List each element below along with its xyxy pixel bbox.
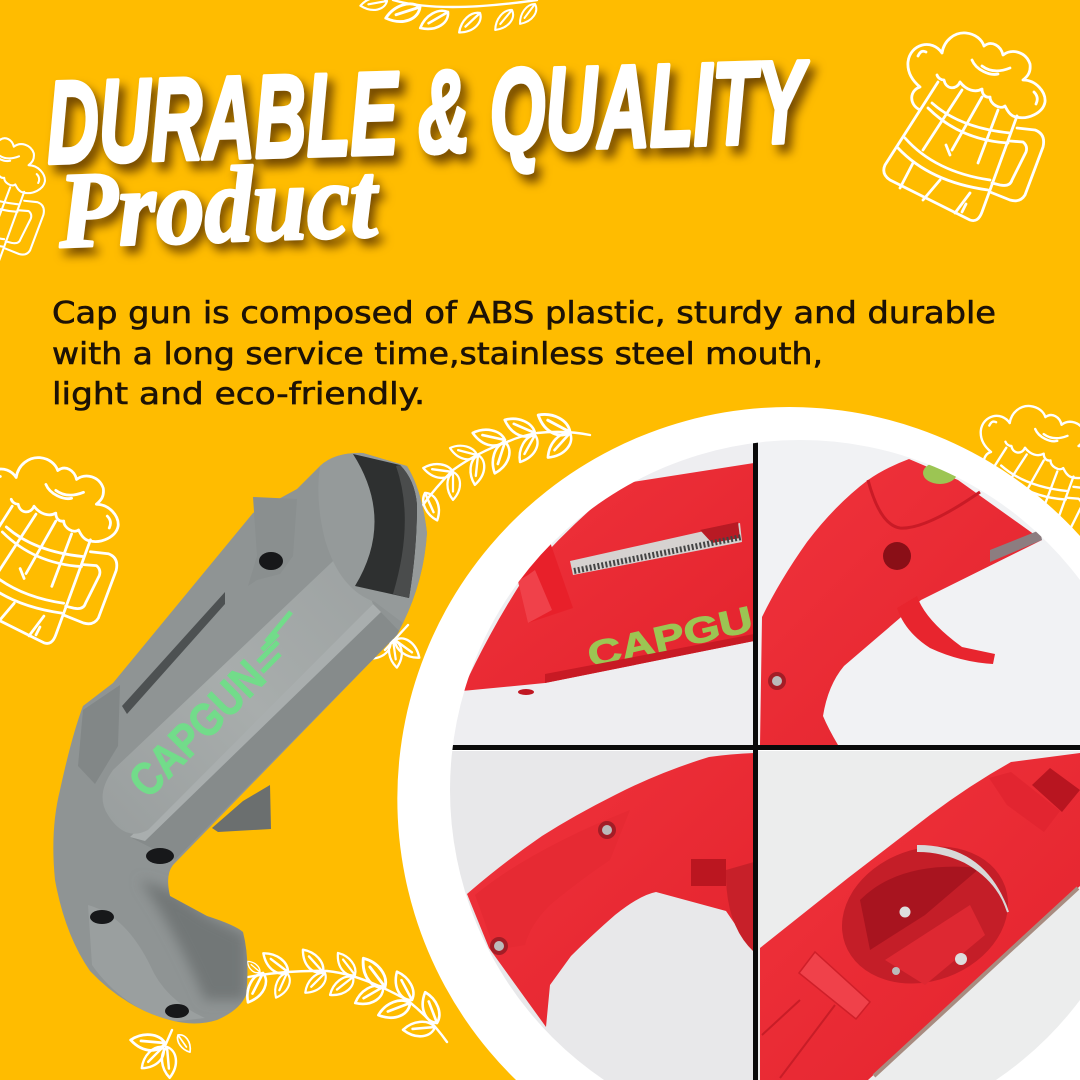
title: product script: Product [56, 141, 381, 271]
silver strip [990, 530, 1042, 562]
groove [762, 1000, 835, 1078]
icon: beer mug top right [884, 33, 1045, 221]
icon: beer mug partial right [960, 406, 1080, 566]
icon: beer mug left [0, 458, 118, 643]
darker recess [860, 867, 980, 950]
trigger [900, 602, 995, 664]
photo grid [440, 430, 1080, 1080]
rear clip [78, 685, 120, 784]
lower clip [799, 952, 870, 1019]
horizontal divider [440, 745, 1080, 750]
upper clip [989, 772, 1060, 832]
screw hole [883, 542, 911, 570]
wheat bottom [242, 946, 447, 1042]
vertical divider [753, 430, 758, 1080]
white circle [397, 407, 1080, 1080]
screw top [598, 821, 616, 839]
wheat top [359, 0, 540, 38]
muzzle collar [318, 453, 427, 623]
screw bottom [490, 937, 508, 955]
grip texture [88, 905, 205, 1022]
opening [842, 846, 1008, 984]
description paragraph [52, 296, 996, 412]
slot [122, 592, 225, 714]
upper slot [1032, 768, 1080, 812]
spring [574, 537, 742, 571]
icon: beer mug partial top left [0, 130, 45, 269]
panel: top left photo [440, 430, 756, 747]
wheat middle [420, 409, 590, 523]
grip texture [475, 810, 630, 950]
green logo piece [923, 464, 956, 484]
trigger [212, 785, 271, 832]
muzzle inner wall [393, 465, 417, 598]
bottom hole [518, 689, 534, 695]
bottom edge [874, 888, 1078, 1076]
body screw [146, 848, 174, 864]
trigger curve [726, 862, 754, 952]
logo mark [258, 612, 291, 672]
red gun top view [760, 753, 1080, 1080]
spring slot [570, 523, 742, 575]
logo text: CAPGUN [118, 650, 275, 807]
red gun elbow [760, 459, 1042, 745]
inner rivets [900, 906, 910, 918]
lower rail [545, 634, 754, 683]
product photo: grey cap gun [53, 453, 427, 1023]
panel: bottom left photo [440, 751, 755, 1080]
grip screw bottom [165, 1004, 189, 1018]
red gun barrel [462, 463, 754, 691]
description paragraph: with a long service time,stainless steel mouth, [52, 337, 823, 372]
front clip [248, 497, 297, 586]
steel mouth [918, 846, 1008, 912]
clip shade [518, 570, 552, 623]
panel: top right photo [755, 430, 1080, 747]
red gun grip [467, 753, 754, 1027]
logo panel [103, 545, 373, 834]
lower rail [130, 604, 400, 860]
screw [768, 672, 786, 690]
shading [88, 453, 427, 1022]
wheat behind gun [366, 625, 424, 668]
wheat bottom left [130, 1030, 194, 1078]
rail highlight [130, 604, 381, 841]
red clip [518, 542, 573, 623]
muzzle opening [353, 454, 417, 598]
dark slot end [700, 522, 740, 543]
description paragraph: Cap gun is composed of ABS plastic, sturdy and durable [52, 296, 996, 331]
logo text: CAPGU [584, 598, 756, 676]
grip screw top [90, 910, 114, 924]
description paragraph: light and eco-friendly. [52, 377, 425, 412]
grip shadow [140, 880, 246, 1000]
gun body [53, 453, 427, 1023]
collar line [868, 480, 980, 528]
inner plate [885, 905, 985, 985]
dark trigger block [691, 859, 726, 886]
panel: bottom right photo [755, 751, 1080, 1080]
front screw [259, 552, 283, 570]
